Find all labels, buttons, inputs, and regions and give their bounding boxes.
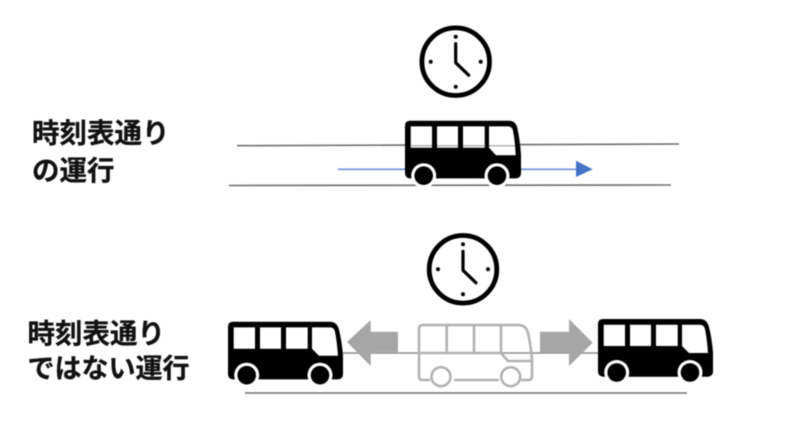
bus: ahead of schedule, left [228, 322, 343, 388]
arrow: gray, earlier bus [347, 320, 398, 366]
road line: off-schedule [245, 392, 687, 394]
label: on-schedule operation: の運行 [32, 155, 114, 186]
connector line between buses [343, 352, 598, 354]
label: off-schedule operation [28, 318, 190, 384]
label: on-schedule operation: 時刻表通り [32, 118, 170, 148]
label: on-schedule operation [32, 118, 170, 186]
label: off-schedule operation: 時刻表通り [28, 318, 165, 349]
label: off-schedule operation: ではない運行 [28, 354, 190, 384]
arrow: gray, later bus [540, 319, 593, 366]
bus: behind schedule, right [598, 319, 713, 385]
arrow: blue travel direction [338, 161, 593, 177]
clock: off-schedule [429, 235, 497, 303]
ghost bus: scheduled position [419, 325, 532, 386]
bus: on-schedule [405, 121, 521, 188]
road lines: on-schedule [229, 144, 679, 186]
clock: on-schedule [422, 28, 490, 96]
